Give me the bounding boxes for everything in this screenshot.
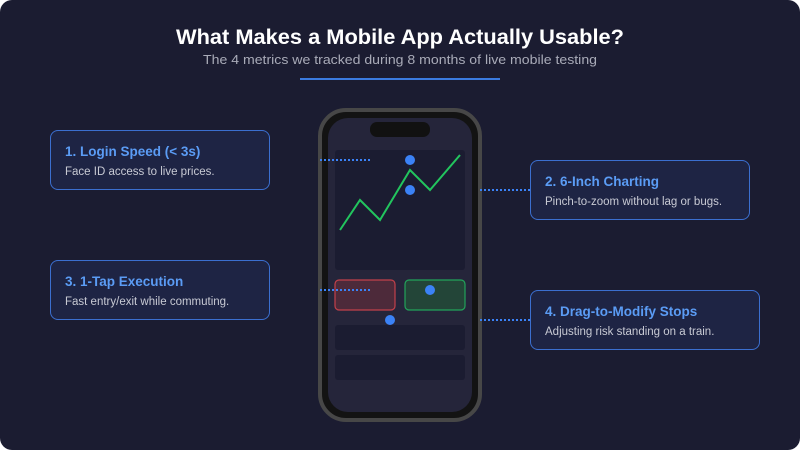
card 1 — [50, 130, 270, 190]
card 4: Adjusting risk standing on a train. — [545, 326, 714, 338]
card 3: 3. 1-Tap Execution — [65, 274, 183, 289]
card 2 — [530, 160, 750, 220]
title: What Makes a Mobile App Actually Usable? — [176, 26, 624, 49]
card 1: 1. Login Speed (< 3s) — [65, 144, 200, 159]
underline — [300, 78, 500, 80]
header — [176, 26, 624, 80]
card 2: 2. 6-Inch Charting — [545, 174, 659, 189]
card 4: 4. Drag-to-Modify Stops — [545, 304, 697, 319]
buy button — [405, 280, 465, 310]
sell button — [335, 280, 395, 310]
connector lines — [320, 160, 530, 320]
touch dots — [385, 155, 435, 325]
card 3: Fast entry/exit while commuting. — [65, 296, 229, 308]
subtitle: The 4 metrics we tracked during 8 months of live mobile testing — [203, 53, 597, 67]
card 3 — [50, 260, 270, 320]
card 4 — [530, 290, 760, 350]
card 1: Face ID access to live prices. — [65, 166, 215, 178]
chart panel — [335, 150, 465, 270]
card 2: Pinch-to-zoom without lag or bugs. — [545, 196, 722, 208]
